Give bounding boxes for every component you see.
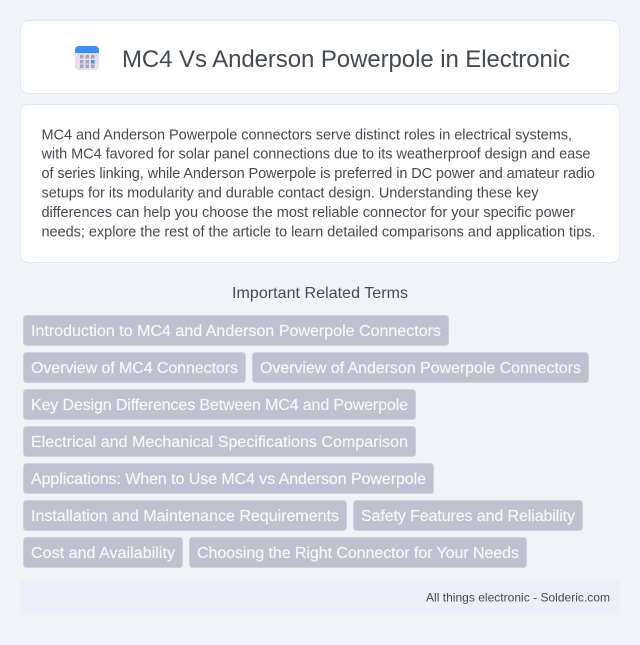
tag: specifications: Electrical and Mechanical Specifications Comparison — [31, 434, 408, 451]
tag: design differences: Key Design Differences Between MC4 and Powerpole — [31, 397, 408, 414]
tag: specifications — [24, 426, 416, 456]
tag: installation — [24, 500, 346, 530]
tag: introduction: Introduction to MC4 and Anderson Powerpole Connectors — [31, 323, 441, 340]
tag: overview MC4: Overview of MC4 Connectors — [31, 360, 238, 377]
text block: description: of series linking, while Anderson Powerpole is preferred in DC power and amateur radio — [42, 166, 595, 182]
tag: cost: Cost and Availability — [31, 545, 175, 562]
tag: design differences — [24, 390, 416, 420]
icon: calendar — [75, 46, 99, 70]
tag: overview MC4 — [24, 352, 246, 382]
tag: installation: Installation and Maintenance Requirements — [31, 508, 339, 525]
tag: safety: Safety Features and Reliability — [361, 508, 575, 525]
tag: applications — [24, 464, 434, 494]
heading: related terms: Important Related Terms — [232, 285, 408, 302]
tag: choosing: Choosing the Right Connector for Your Needs — [197, 545, 519, 562]
footer — [20, 581, 620, 615]
footer: All things electronic - Solderic.com — [426, 591, 610, 605]
text block: description: setups for its modularity and durable contact design. Understanding these key — [42, 186, 539, 202]
tag: introduction — [24, 316, 448, 346]
text block: description: with MC4 favored for solar panel connections due to its weatherproof design and ease — [40, 147, 590, 163]
tag: cost — [24, 538, 182, 568]
tag: choosing — [190, 538, 526, 568]
tag: safety — [354, 500, 582, 530]
tag: overview Anderson — [252, 352, 588, 382]
text block: description — [40, 127, 596, 241]
text block: description: MC4 and Anderson Powerpole connectors serve distinct roles in electrical systems, — [42, 127, 572, 143]
title: MC4 Vs Anderson Powerpole in Electronic — [122, 46, 570, 73]
tag: applications: Applications: When to Use MC4 vs Anderson Powerpole — [31, 471, 426, 488]
panel: related terms tags — [24, 316, 588, 568]
panel: description card — [20, 104, 620, 262]
text block: description: needs; explore the rest of the article to learn detailed comparisons and application tips. — [42, 225, 596, 241]
text block: description: differences can help you choose the most reliable connector for your specific power — [42, 205, 575, 221]
tag: overview Anderson: Overview of Anderson Powerpole Connectors — [260, 360, 581, 377]
panel: header card — [20, 20, 620, 94]
